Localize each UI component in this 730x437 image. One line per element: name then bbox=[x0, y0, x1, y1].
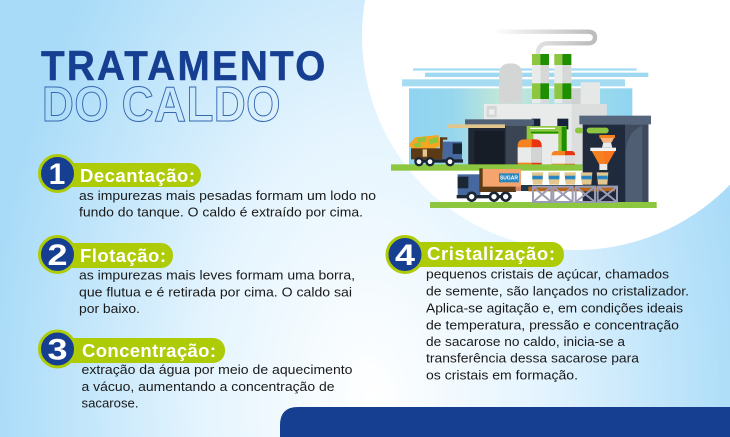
title: TRATAMENTO bbox=[41, 41, 325, 89]
title: DO CALDO bbox=[42, 77, 281, 132]
step 4: Cristalização: de sacarose no caldo, inicia-se a bbox=[426, 335, 625, 349]
step 3: Concentração: Concentração: bbox=[82, 340, 216, 361]
step 4: Cristalização: os cristais em formação. bbox=[426, 368, 578, 382]
right shed bbox=[579, 116, 651, 202]
step 3: Concentração bbox=[40, 331, 353, 410]
step 1: Decantação: 1 bbox=[49, 158, 65, 191]
step 4: Cristalização: de temperatura, pressão e concentração bbox=[426, 318, 679, 332]
sugar bags bbox=[532, 172, 608, 185]
step 1: Decantação bbox=[40, 156, 376, 220]
green pipe bbox=[527, 126, 567, 152]
left shed bbox=[448, 119, 534, 165]
conveyor belt bbox=[521, 185, 618, 202]
white circle behind the illustration bbox=[362, 0, 730, 250]
step 2: Flotação: Flotação: bbox=[80, 245, 166, 266]
step 4: Cristalização: Cristalização: bbox=[427, 243, 555, 264]
step 3: Concentração: sacarose. bbox=[82, 396, 138, 410]
sugar truck: SUGAR bbox=[500, 176, 518, 182]
step 3: Concentração: a vácuo, aumentando a concentração de bbox=[82, 380, 335, 394]
sugar truck bbox=[457, 168, 521, 202]
title bbox=[41, 41, 325, 132]
tanks bbox=[518, 139, 575, 166]
step 3: Concentração: 3 bbox=[48, 334, 68, 366]
ground bottom bbox=[430, 202, 657, 208]
step 1: Decantação: as impurezas mais pesadas formam um lodo no bbox=[79, 189, 376, 203]
funnel machine bbox=[575, 128, 616, 170]
bottom bar bbox=[280, 407, 730, 437]
step 2: Flotação bbox=[40, 236, 355, 316]
truck with sugar cane bbox=[409, 135, 463, 166]
step 2: Flotação: que flutua e é retirada por cima. O caldo sai bbox=[79, 286, 352, 300]
smoke bbox=[492, 32, 595, 54]
step 4: Cristalização: pequenos cristais de açúcar, chamados bbox=[426, 268, 669, 282]
step 1: Decantação: Decantação: bbox=[80, 165, 195, 186]
step 2: Flotação: 2 bbox=[48, 239, 68, 272]
step 4: Cristalização: transferência dessa sacarose para bbox=[426, 352, 639, 366]
step 4: Cristalização: de semente, são lançados no cristalizador. bbox=[426, 284, 689, 298]
step 2: Flotação: as impurezas mais leves formam uma borra, bbox=[79, 268, 355, 282]
ground top bbox=[391, 164, 582, 171]
illustration: sugar factory bbox=[391, 32, 657, 208]
step 2: Flotação: por baixo. bbox=[79, 302, 140, 316]
chimneys bbox=[532, 54, 571, 103]
step 4: Cristalização: Aplica-se agitação e, em condições ideais bbox=[426, 302, 683, 316]
step 4: Cristalização bbox=[387, 236, 689, 382]
step 3: Concentração: extração da água por meio de aquecimento bbox=[82, 363, 353, 377]
step 4: Cristalização: 4 bbox=[395, 239, 415, 272]
step 1: Decantação: fundo do tanque. O caldo é extraído por cima. bbox=[79, 206, 363, 220]
factory building bbox=[484, 63, 607, 165]
sky bbox=[402, 68, 648, 167]
